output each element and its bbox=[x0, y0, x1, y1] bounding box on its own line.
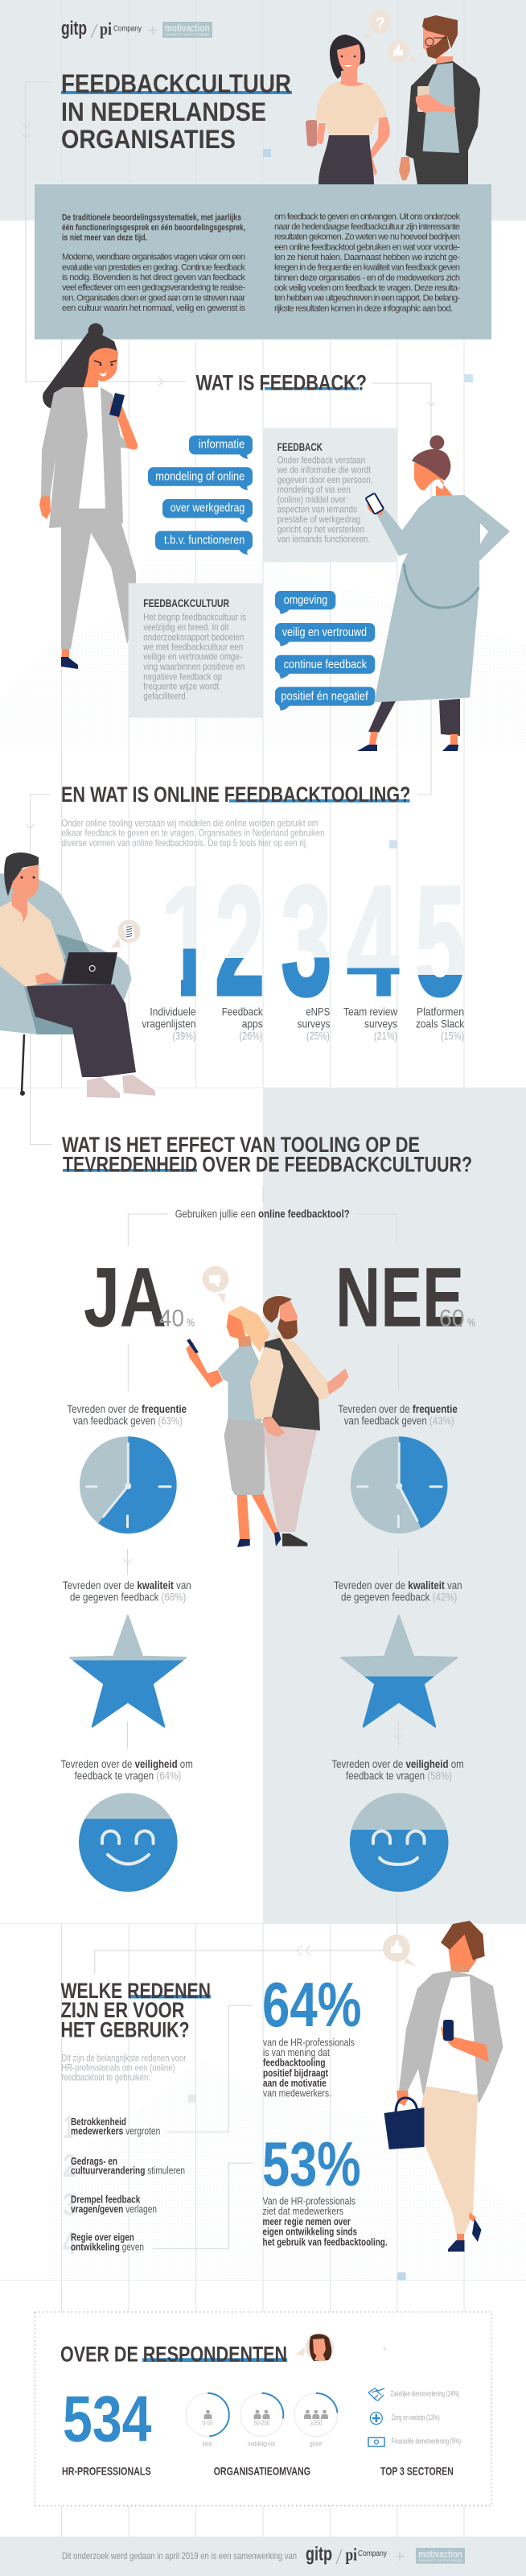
chart: rank 5 platformen zoals Slack: Platformen bbox=[417, 1006, 464, 1018]
chart: rank 3 eNPS surveys: (25%) bbox=[306, 1030, 330, 1042]
stat: 534 hr-professionals: 534 bbox=[63, 2384, 151, 2456]
stat: 534 hr-professionals: HR-PROFESSIONALS bbox=[62, 2464, 151, 2477]
chart: rank 4 team review surveys bbox=[343, 853, 399, 1042]
icon: document speech bubble bbox=[111, 919, 140, 947]
star right: kwaliteit 42% bbox=[334, 1579, 462, 1727]
text block: redenen intro: Dit zijn de belangrijkste redenen voor bbox=[61, 2053, 186, 2064]
intro text column one: ren. Organisaties doen er goed aan om te streven naar bbox=[62, 293, 245, 303]
heading: welke redenen: HET GEBRUIK? bbox=[61, 2018, 190, 2042]
panel: feedback definition: van iemands functioneren. bbox=[277, 534, 370, 545]
chart: rank 4 team review surveys: Team review bbox=[343, 1006, 397, 1018]
stat: 53 percent bbox=[262, 2128, 388, 2248]
panel: feedbackcultuur definition bbox=[129, 583, 263, 718]
heading: welke redenen: WELKE REDENEN bbox=[61, 1979, 211, 2003]
intro text column one: is nodig. Bovendien is het direct geven van feedback bbox=[62, 273, 246, 283]
chart: rank 2 feedback apps: apps bbox=[242, 1018, 263, 1030]
speech bubble: informatie: informatie bbox=[199, 438, 245, 452]
clock right: frequentie 43%: van feedback geven (43%) bbox=[344, 1414, 454, 1426]
panel: feedback definition: FEEDBACK bbox=[277, 440, 323, 453]
intro text column two bbox=[274, 212, 460, 313]
stat: 534 hr-professionals bbox=[62, 2384, 151, 2477]
chart: rank 3 eNPS surveys: surveys bbox=[298, 1018, 331, 1030]
speech bubble: veilig en vertrouwd: veilig en vertrouwd bbox=[282, 625, 367, 639]
panel: over de respondenten bbox=[35, 2312, 491, 2506]
chart: rank 5 platformen zoals Slack: (15%) bbox=[441, 1030, 464, 1042]
text block: redenen intro bbox=[61, 2053, 186, 2083]
reason 4: Regie over eigen bbox=[71, 2231, 134, 2244]
sector: financiele dienstverlening: Financiële dienstverlening (9%) bbox=[392, 2438, 461, 2446]
illustration: woman in blue coat with phone bbox=[357, 436, 510, 751]
connector arrow: online tooling to effect section bbox=[26, 795, 51, 1145]
speech bubble: over werkgedrag: over werkgedrag bbox=[171, 502, 245, 515]
star right: kwaliteit 42%: Tevreden over de kwaliteit van bbox=[334, 1579, 462, 1591]
logos: footer: gitp bbox=[306, 2544, 332, 2565]
chart: rank 1 individuele vragenlijsten: (39%) bbox=[172, 1030, 196, 1042]
logos: header: pi bbox=[100, 19, 112, 39]
icon: thumbs up bubble bbox=[383, 1934, 417, 1967]
illustration: woman with cup bbox=[306, 35, 390, 184]
stat: 64 percent: 64% bbox=[262, 1969, 362, 2040]
logos: header: motivaction bbox=[165, 22, 210, 34]
panel: feedbackcultuur definition: veelzijdig en breed. In dit bbox=[143, 621, 229, 633]
heading: over de respondenten: OVER DE RESPONDENTEN bbox=[60, 2342, 287, 2366]
list: reasons bbox=[63, 2110, 185, 2261]
speech bubble: veilig en vertrouwd bbox=[275, 623, 375, 646]
smiley left: veiligheid 64% bbox=[61, 1758, 193, 1892]
panel: feedback definition bbox=[263, 428, 397, 562]
chart: rank 3 eNPS surveys: 3 bbox=[281, 853, 331, 1029]
panel: feedback definition: we de informatie die wordt bbox=[277, 464, 372, 476]
footer bbox=[62, 2544, 465, 2565]
big answer: JA 40%: 40 bbox=[159, 1305, 184, 1331]
panel: feedbackcultuur definition: negatieve feedback op bbox=[143, 671, 222, 682]
intro text column one: is niet meer van deze tijd. bbox=[62, 233, 147, 243]
intro text column one: evaluatie van prestaties en gedrag. Continue feedback bbox=[62, 262, 246, 272]
speech bubble: t.b.v. functioneren bbox=[155, 531, 253, 555]
reason 4: 4 bbox=[63, 2226, 77, 2261]
icon: respondent avatar bbox=[295, 2333, 386, 2361]
chart: rank 1 individuele vragenlijsten bbox=[142, 886, 196, 1042]
chart: rank 1 individuele vragenlijsten: vragenlijsten bbox=[142, 1018, 195, 1030]
chart: rank 3 eNPS surveys: eNPS bbox=[306, 1006, 330, 1018]
speech bubble: omgeving: omgeving bbox=[284, 593, 327, 607]
panel: feedbackcultuur definition: onderzoeksrapport bedoelen bbox=[143, 631, 244, 642]
connector arrow: feedback to online tooling bbox=[372, 383, 435, 795]
chart: rank 4 team review surveys: (21%) bbox=[374, 1030, 397, 1042]
speech bubble: mondeling of online bbox=[148, 467, 253, 490]
big answer: JA 40%: JA bbox=[84, 1251, 166, 1345]
big answer: NEE 60%: 60 bbox=[439, 1305, 465, 1331]
list: top 3 sectoren bbox=[368, 2388, 461, 2477]
intro text column two: ten hebben we uitgeschreven in een rapport. De belang- bbox=[274, 294, 460, 303]
smiley left: veiligheid 64%: feedback te vragen (64%) bbox=[75, 1770, 181, 1782]
speech bubble: over werkgedrag bbox=[162, 499, 253, 522]
star left: kwaliteit 68%: de gegeven feedback (68%) bbox=[70, 1591, 186, 1604]
panel: feedback definition: prestatie of werkgedrag bbox=[277, 514, 360, 525]
illustration: couple back to back bbox=[186, 1296, 349, 1547]
smiley right: veiligheid 58% bbox=[331, 1758, 464, 1892]
icon: thumbs up speech bubble bbox=[388, 40, 418, 63]
logos: header bbox=[61, 18, 212, 39]
logos: header: research and strategy bbox=[165, 32, 210, 36]
panel: feedbackcultuur definition: frequente wijze wordt bbox=[143, 681, 220, 692]
stat: 64 percent bbox=[262, 1969, 362, 2099]
question with bracket: Gebruiken jullie een online feedbacktool? bbox=[175, 1208, 350, 1220]
reason 1: Betrokkenheid bbox=[71, 2116, 126, 2128]
ring: groot: groot bbox=[310, 2440, 323, 2447]
ring: groot bbox=[294, 2393, 338, 2447]
icon: speech bubble above couple bbox=[203, 1266, 228, 1303]
speech bubble: continue feedback bbox=[275, 655, 375, 679]
ring: middelgroot: middelgroot bbox=[248, 2440, 276, 2447]
panel: feedbackcultuur definition: veilige en vertrouwde omge- bbox=[143, 651, 242, 663]
chart: rank 5 platformen zoals Slack bbox=[415, 853, 466, 1042]
panel: feedbackcultuur definition: gefaciliteerd. bbox=[143, 691, 187, 702]
reason 3: Drempel feedback bbox=[71, 2194, 141, 2206]
intro text column two: len ze hieruit halen. Daarnaast hebben we inzicht ge- bbox=[274, 253, 460, 262]
intro text column one: een cultuur waarin het normaal, veilig en gewenst is bbox=[62, 303, 246, 313]
text block: online tooling intro bbox=[61, 818, 325, 848]
text block: online tooling intro: Onder online tooling verstaan wij middelen die online worden gebruikt om bbox=[61, 818, 318, 829]
chart: rank 2 feedback apps: Feedback bbox=[222, 1006, 263, 1018]
star right: kwaliteit 42%: de gegeven feedback (42%) bbox=[341, 1591, 457, 1604]
list: top 3 sectoren: TOP 3 SECTOREN bbox=[380, 2464, 454, 2477]
panel: feedback definition: gericht op het versterken bbox=[277, 523, 364, 535]
clock right: frequentie 43%: Tevreden over de frequentie bbox=[338, 1403, 458, 1415]
logos: footer bbox=[306, 2544, 465, 2565]
logos: footer: Company bbox=[358, 2549, 387, 2558]
chart: rank 5 platformen zoals Slack: 5 bbox=[415, 853, 466, 1029]
chart: organisatieomvang rings bbox=[186, 2393, 338, 2477]
ring: groot: ≥250 bbox=[310, 2420, 323, 2427]
speech bubble: mondeling of online: mondeling of online bbox=[155, 469, 245, 483]
logos: footer: research and strategy bbox=[418, 2558, 463, 2562]
chart: rank 4 team review surveys: surveys bbox=[364, 1018, 397, 1030]
icon: question mark speech bubble bbox=[364, 10, 391, 39]
reason 3: 3 bbox=[63, 2187, 76, 2223]
chart: rank 1 individuele vragenlijsten: 1 bbox=[159, 852, 217, 1030]
sector: zorg en welzijn: Zorg en welzijn (13%) bbox=[392, 2413, 440, 2422]
smiley right: veiligheid 58%: feedback te vragen (58%) bbox=[346, 1770, 452, 1782]
panel: feedbackcultuur definition: ving waarbinnen positieve en bbox=[143, 661, 245, 672]
big answer: NEE 60%: % bbox=[467, 1315, 475, 1328]
illustration: woman in grey suit with phone bbox=[39, 324, 138, 669]
reason 3: vragen/geven verlagen bbox=[71, 2202, 157, 2215]
clock left: frequentie 63%: Tevreden over de frequentie bbox=[67, 1403, 187, 1415]
chart: rank 2 feedback apps: (26%) bbox=[240, 1030, 262, 1042]
stat: 64 percent: van de HR-professionals bbox=[263, 2037, 355, 2049]
connector arrow: to redenen section bbox=[95, 1946, 384, 1974]
panel: feedback definition: mondeling of via een bbox=[277, 484, 351, 495]
reason 3 bbox=[63, 2187, 157, 2223]
stat: 53 percent: Van de HR-professionals bbox=[262, 2194, 355, 2207]
chart: organisatieomvang rings: ORGANISATIEOMVANG bbox=[214, 2464, 310, 2477]
star left: kwaliteit 68%: Tevreden over de kwaliteit van bbox=[63, 1579, 191, 1591]
question with bracket bbox=[128, 1186, 397, 1246]
stat: 64 percent: aan de motivatie bbox=[263, 2077, 327, 2089]
chart: rank 1 individuele vragenlijsten: Individuele bbox=[150, 1006, 195, 1018]
intro text column two: een online feedbacktool gebruiken en wat voor voorde- bbox=[274, 242, 460, 252]
ring: klein: 0-50 bbox=[203, 2420, 213, 2427]
chart: rank 2 feedback apps: 2 bbox=[215, 853, 265, 1029]
stat: 64 percent: van medewerkers. bbox=[263, 2087, 331, 2099]
intro text column one: Moderne, wendbare organisaties vragen vaker om een bbox=[62, 253, 245, 262]
speech bubble: omgeving bbox=[275, 591, 335, 614]
panel: feedbackcultuur definition: we met feedbackcultuur een bbox=[142, 641, 243, 652]
heading: online feedbacktooling: EN WAT IS ONLINE FEEDBACKTOOLING? bbox=[61, 782, 410, 807]
chart: rank 2 feedback apps bbox=[215, 853, 265, 1042]
panel: feedbackcultuur definition: FEEDBACKCULTUUR bbox=[143, 597, 229, 609]
footer: Dit onderzoek werd gedaan in april 2019 en is een samenwerking van bbox=[62, 2550, 297, 2562]
heading: effect van tooling: WAT IS HET EFFECT VAN TOOLING OP DE bbox=[62, 1133, 420, 1157]
title: FEEDBACKCULTUUR bbox=[61, 69, 291, 98]
stat: 53 percent: het gebruik van feedbacktooling. bbox=[262, 2235, 388, 2248]
heading: welke redenen: ZIJN ER VOOR bbox=[61, 1998, 184, 2022]
speech bubble: continue feedback: continue feedback bbox=[284, 658, 367, 671]
stat: 64 percent: positief bijdraagt bbox=[263, 2066, 329, 2079]
chart: rank 3 eNPS surveys bbox=[281, 853, 331, 1042]
logos: footer: pi bbox=[346, 2544, 357, 2565]
speech bubble: positief en negatief bbox=[275, 687, 375, 711]
heading: effect van tooling bbox=[62, 1133, 472, 1176]
smiley right: veiligheid 58%: Tevreden over de veiligheid om bbox=[331, 1758, 464, 1770]
text block: redenen intro: HR-professionals om een (online) bbox=[61, 2062, 175, 2073]
icon: question mark speech bubble: ? bbox=[376, 15, 385, 32]
illustration: man on chair with laptop bbox=[0, 852, 155, 1098]
title: ORGANISATIES bbox=[61, 125, 236, 154]
reason 1 bbox=[64, 2110, 160, 2145]
stat: 53 percent: meer regie nemen over bbox=[262, 2215, 351, 2227]
panel: feedback definition: (online) middel over bbox=[277, 493, 346, 505]
chart: rank 4 team review surveys: 4 bbox=[347, 853, 399, 1029]
panel: introduction bbox=[35, 184, 491, 340]
intro text column two: binnen deze organisaties - en of de medewerkers zich bbox=[274, 273, 460, 283]
title: IN NEDERLANDSE bbox=[61, 97, 266, 126]
clock right: frequentie 43% bbox=[338, 1403, 458, 1534]
heading: welke redenen bbox=[61, 1979, 211, 2042]
panel: feedback definition: gegeven door een persoon, bbox=[277, 474, 372, 485]
stat: 53 percent: eigen ontwikkeling sinds bbox=[262, 2226, 357, 2238]
speech bubble: t.b.v. functioneren: t.b.v. functioneren bbox=[164, 534, 245, 547]
title bbox=[61, 69, 292, 154]
connector arrow: header to section feedback bbox=[22, 82, 186, 386]
logos: footer: motivaction bbox=[418, 2548, 462, 2560]
ring: klein: klein bbox=[203, 2440, 212, 2447]
intro text column one: veel effectiever om een gedragsverandering te realise- bbox=[62, 283, 245, 293]
speech bubble: positief en negatief: positief én negatief bbox=[281, 690, 368, 704]
intro text column two: naar de hedendaagse feedbackcultuur zijn interessante bbox=[274, 222, 460, 232]
stat: 53 percent: ziet dat medewerkers bbox=[262, 2205, 343, 2217]
reason 2: cultuurverandering stimuleren bbox=[71, 2165, 185, 2177]
smiley left: veiligheid 64%: Tevreden over de veiligheid om bbox=[61, 1758, 193, 1770]
intro text column two: resultaten gekomen. Zo weten we nu hoeveel bedrijven bbox=[274, 233, 460, 242]
chart: rank 5 platformen zoals Slack: zoals Slack bbox=[416, 1018, 464, 1030]
panel: feedbackcultuur definition: Het begrip feedbackcultuur is bbox=[143, 612, 246, 623]
text block: online tooling intro: elkaar feedback te geven en te vragen. Organisaties in Nederland gebruiken bbox=[61, 828, 325, 839]
panel: feedback definition: Onder feedback verstaan bbox=[277, 454, 365, 465]
intro text column two: ook veilig voelen om feedback te vragen. Deze resulta- bbox=[274, 283, 460, 293]
intro text column two: rijkste resultaten komen in deze infographic aan bod. bbox=[274, 303, 453, 313]
big answer: JA 40%: % bbox=[187, 1315, 195, 1328]
logos: header: gitp bbox=[61, 18, 87, 39]
intro text column one bbox=[62, 213, 246, 313]
star left: kwaliteit 68% bbox=[63, 1579, 191, 1727]
ring: klein bbox=[186, 2393, 229, 2447]
reason 1: medewerkers vergroten bbox=[71, 2125, 160, 2137]
speech bubble: informatie bbox=[189, 436, 253, 459]
big answer: NEE 60%: NEE bbox=[335, 1251, 464, 1345]
stat: 53 percent: 53% bbox=[262, 2128, 361, 2199]
reason 1: 1 bbox=[64, 2110, 73, 2145]
text block: online tooling intro: diverse vormen van online feedbacktools. De top 5 tools hier op een rij. bbox=[61, 837, 308, 848]
logos: header: Company bbox=[113, 24, 142, 34]
reason 2: Gedrags- en bbox=[71, 2155, 117, 2167]
heading: wat is feedback: WAT IS FEEDBACK? bbox=[196, 370, 367, 394]
intro text column two: om feedback te geven en ontvangen. Uit ons onderzoek bbox=[274, 212, 460, 221]
sector: zakelijke dienstverlening: Zakelijke dienstverlening (24%) bbox=[390, 2390, 459, 2399]
stat: 64 percent: feedbacktooling bbox=[263, 2057, 326, 2069]
panel: feedback definition: aspecten van iemands bbox=[277, 504, 357, 515]
stat: 64 percent: is van mening dat bbox=[263, 2046, 330, 2058]
ring: middelgroot bbox=[240, 2393, 283, 2447]
reason 4: ontwikkeling geven bbox=[71, 2240, 144, 2252]
clock left: frequentie 63% bbox=[67, 1403, 187, 1534]
reason 4 bbox=[63, 2226, 144, 2261]
clock left: frequentie 63%: van feedback geven (63%) bbox=[73, 1414, 183, 1426]
ring: middelgroot: 50-250 bbox=[254, 2420, 270, 2427]
intro text column one: één functioneringsgesprek en één beoordelingsgesprek, bbox=[62, 223, 245, 233]
intro text column two: kregen in de frequentie en kwaliteit van feedback geven bbox=[274, 263, 460, 273]
illustration: woman with bag bbox=[384, 1921, 503, 2252]
reason 2: 2 bbox=[63, 2149, 76, 2184]
intro text column one: De traditionele beoordelingssystematiek, met jaarlijks bbox=[62, 213, 241, 222]
reason 2 bbox=[63, 2149, 185, 2184]
text block: redenen intro: feedbacktool te gebruiken: bbox=[61, 2071, 150, 2083]
illustration: man with cup bbox=[399, 15, 480, 184]
